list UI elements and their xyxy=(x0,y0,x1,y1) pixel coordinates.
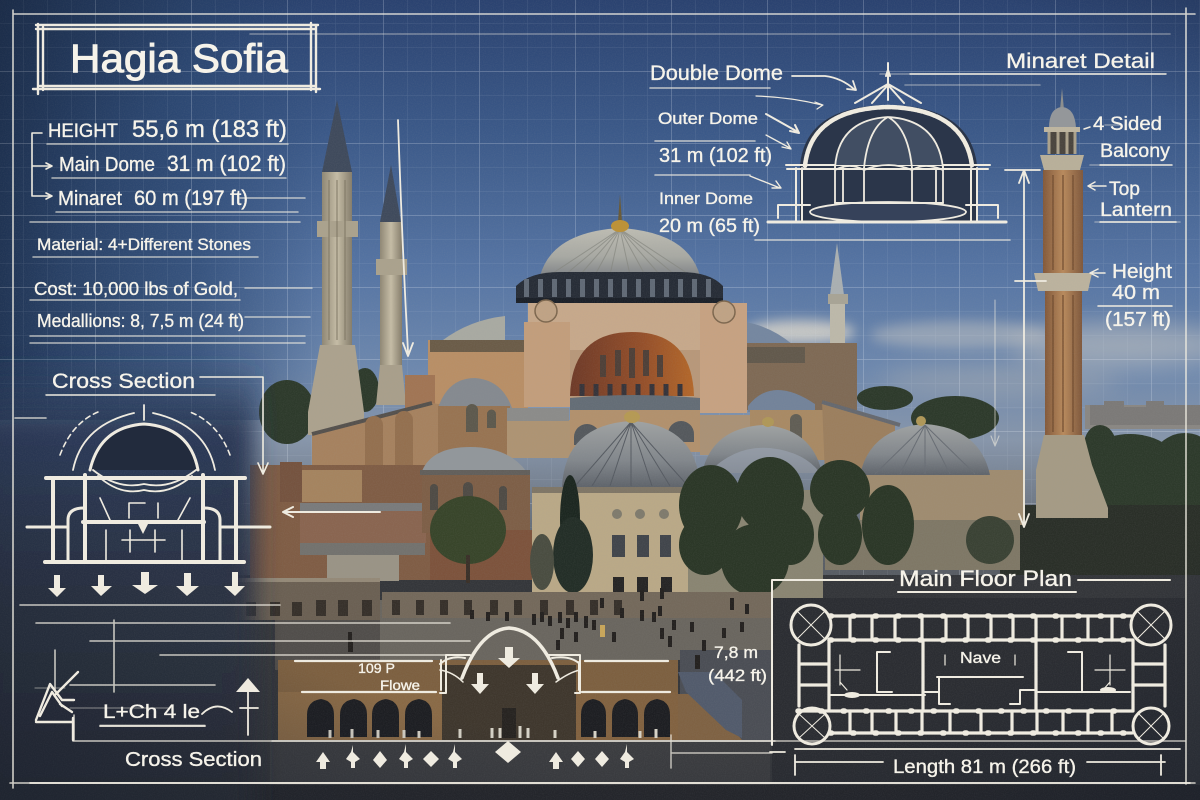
dimensions list: Material: 4+Different Stones xyxy=(37,235,251,254)
minaret detail tower xyxy=(1034,88,1108,518)
plaza crowd xyxy=(348,588,749,669)
left lower dark panel xyxy=(0,360,255,800)
lower left wing xyxy=(312,403,445,468)
left mid half dome xyxy=(438,378,512,408)
left dimension arrows xyxy=(200,120,413,517)
dimensions list: 31 m (102 ft) xyxy=(167,151,286,176)
dome drum xyxy=(516,272,723,302)
dimensions list: Medallions: 8, 7,5 m (24 ft) xyxy=(37,311,244,331)
arcade wall xyxy=(210,578,772,620)
double dome arrows xyxy=(750,76,856,188)
lower facade xyxy=(278,660,742,740)
inner details xyxy=(830,652,1130,704)
dimensions list: Cost: 10,000 lbs of Gold, xyxy=(34,279,238,299)
foundation arrows xyxy=(48,572,245,597)
dome finial xyxy=(618,194,622,222)
facade note: 109 P xyxy=(358,660,395,676)
front dome xyxy=(562,421,700,487)
floor markers row xyxy=(316,741,634,769)
cross section drawing xyxy=(27,395,270,597)
double dome labels: Inner Dome xyxy=(659,189,753,208)
minaret: far right small xyxy=(828,243,848,370)
bottom frame line xyxy=(30,782,1190,784)
minaret detail labels: 40 m xyxy=(1112,282,1160,304)
ramp dimension label: (442 ft) xyxy=(708,666,767,685)
arcade openings xyxy=(307,699,670,737)
distant skyline and trees xyxy=(259,368,1200,605)
facade arrows xyxy=(471,647,544,694)
double dome labels: 31 m (102 ft) xyxy=(659,145,772,167)
minaret detail labels: Height xyxy=(1112,261,1172,283)
ramp dimension label: 7,8 m xyxy=(714,643,758,662)
trees xyxy=(430,457,1014,596)
plan walls xyxy=(798,616,1165,733)
cross section label: Cross Section xyxy=(52,370,195,393)
wall behind trees xyxy=(688,490,823,600)
minaret detail labels: Balcony xyxy=(1100,141,1171,162)
minaret detail labels: Top xyxy=(1109,179,1140,200)
minaret: left short xyxy=(376,165,407,405)
right mid wing xyxy=(700,415,750,455)
minaret: left tall xyxy=(308,100,364,435)
arch overlay on facade: Flowe xyxy=(380,677,420,693)
dimensions list: 60 m (197 ft) xyxy=(134,187,248,210)
far right wing xyxy=(860,470,1025,525)
panel: floor plan: Length 81 m (266 ft) xyxy=(893,757,1076,778)
double dome labels: Double Dome xyxy=(650,62,783,85)
lower left note: L+Ch 4 le xyxy=(103,702,200,723)
minaret detail labels: Lantern xyxy=(1100,200,1172,221)
minaret detail labels xyxy=(910,50,1176,331)
left rear half dome and wall xyxy=(443,316,505,340)
dimensions list: Minaret xyxy=(58,188,122,210)
ground and plaza xyxy=(0,575,1200,800)
floor plan heading: Main Floor Plan xyxy=(899,566,1072,591)
panel: floor plan backing xyxy=(772,598,1185,784)
nave label: Nave xyxy=(960,650,1001,667)
dimensions list: Main Dome xyxy=(59,154,155,176)
panel: floor plan xyxy=(770,566,1180,778)
dimensions list xyxy=(32,116,287,331)
mid band xyxy=(507,420,571,458)
right rear half dome and wall xyxy=(745,322,792,345)
right domes xyxy=(702,425,822,473)
front building xyxy=(532,487,690,595)
double dome labels: 20 m (65 ft) xyxy=(659,216,760,237)
main building xyxy=(250,194,1025,600)
arch tympanum xyxy=(570,332,694,396)
main dome xyxy=(540,228,700,276)
double dome labels: Outer Dome xyxy=(658,109,758,128)
minaret detail labels: Minaret Detail xyxy=(1006,50,1155,73)
arch overlay on facade xyxy=(295,628,670,694)
medallions xyxy=(535,300,557,322)
dimensions list: HEIGHT xyxy=(48,121,118,142)
title text: Hagia Sofia xyxy=(70,37,289,81)
central block xyxy=(528,303,745,407)
minaret detail labels: 4 Sided xyxy=(1093,114,1162,135)
dimensions list: 55,6 m (183 ft) xyxy=(132,116,287,143)
left small dome xyxy=(422,447,526,471)
double dome section drawing xyxy=(768,63,1006,222)
bottom cross section label: Cross Section xyxy=(125,749,262,771)
title box xyxy=(33,23,320,94)
lower left brick block xyxy=(250,465,430,580)
double dome labels xyxy=(650,62,783,237)
dimension line: minaret height xyxy=(991,170,1046,527)
minaret detail labels: (157 ft) xyxy=(1105,309,1171,331)
tower circles xyxy=(791,605,1171,744)
lower left sketch xyxy=(36,672,260,740)
ramp dimension label xyxy=(708,643,767,685)
length dimension xyxy=(770,749,1180,775)
cypress xyxy=(560,475,580,565)
